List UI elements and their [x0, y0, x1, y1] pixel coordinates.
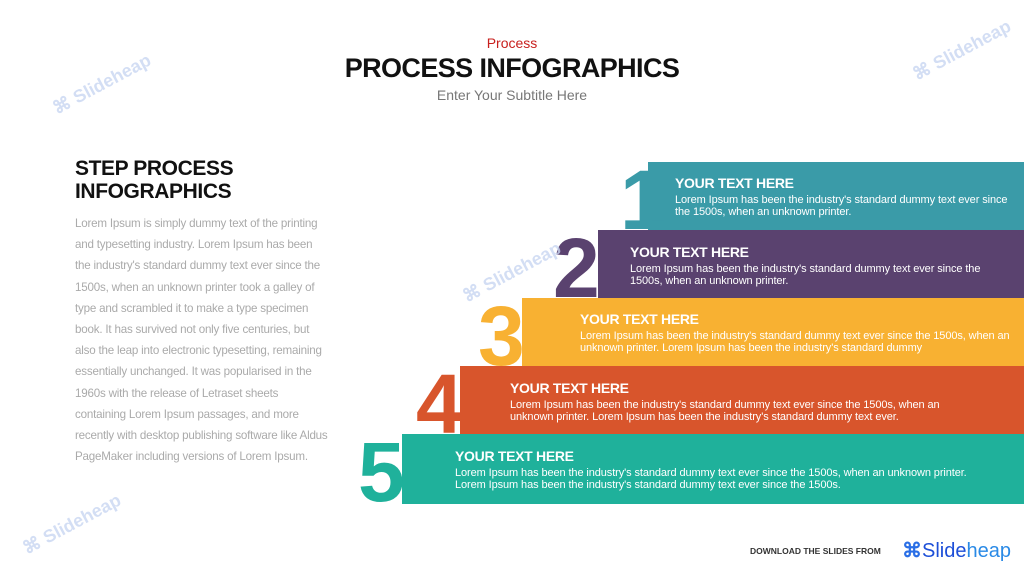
- subtitle: Enter Your Subtitle Here: [437, 87, 587, 103]
- band 2: [598, 230, 1024, 298]
- title: PROCESS INFOGRAPHICS: [345, 53, 679, 83]
- header: [345, 35, 679, 103]
- band 1: [648, 162, 1024, 230]
- text 3: Lorem Ipsum has been the industry's standard dummy text ever since the 1500s, when an unknown printer. Lorem Ipsum has been the industry's standard dummy: [580, 330, 1010, 354]
- kicker: Process: [487, 35, 537, 51]
- text 3: [580, 311, 1010, 354]
- watermark: ⌘ Slideheap: [49, 50, 154, 118]
- left text block: [75, 157, 328, 463]
- band 5: [402, 434, 1024, 504]
- footer text: DOWNLOAD THE SLIDES FROM: [750, 546, 881, 556]
- watermark: ⌘ Slideheap: [459, 238, 564, 306]
- left heading: STEP PROCESS: [75, 157, 233, 180]
- logo: ⌘Slideheap: [902, 540, 1011, 562]
- text 4: YOUR TEXT HERE: [510, 380, 629, 396]
- step 5: [358, 434, 1024, 506]
- left heading: INFOGRAPHICS: [75, 180, 231, 203]
- band 3: [522, 298, 1024, 366]
- text 4: [510, 380, 940, 423]
- text 3: YOUR TEXT HERE: [580, 311, 699, 327]
- text 4: Lorem Ipsum has been the industry's standard dummy text ever since the 1500s, when an unknown printer. Lorem Ipsum has been the industry's standard dummy text ever.: [510, 399, 940, 423]
- watermark: ⌘ Slideheap: [909, 16, 1014, 84]
- step 4: [416, 366, 1024, 438]
- footer brand: [750, 540, 1011, 562]
- band 4: [460, 366, 1024, 434]
- text 5: YOUR TEXT HERE: [455, 448, 574, 464]
- text 1: [675, 175, 1007, 218]
- left heading: [75, 157, 233, 203]
- text 5: [455, 448, 967, 491]
- step 1: [620, 162, 1024, 234]
- text 2: YOUR TEXT HERE: [630, 244, 749, 260]
- text 2: [630, 244, 980, 287]
- step 3: [478, 298, 1024, 370]
- text 1: Lorem Ipsum has been the industry's standard dummy text ever since the 1500s, when an unknown printer.: [675, 194, 1007, 218]
- left body: Lorem Ipsum is simply dummy text of the printing and typesetting industry. Lorem Ipsum has been the industry's standard dummy text ever since the 1500s, when an unknown printer took a galley of type and scrambled it to make a type specimen book. It has survived not only five centuries, but also the leap into electronic typesetting, remaining essentially unchanged. It was popularised in the 1960s with the release of Letraset sheets containing Lorem Ipsum passages, and more recently with desktop publishing software like Aldus PageMaker including versions of Lorem Ipsum.: [75, 217, 328, 463]
- watermark: ⌘ Slideheap: [19, 490, 124, 558]
- text 2: Lorem Ipsum has been the industry's standard dummy text ever since the 1500s, when an unknown printer.: [630, 263, 980, 287]
- step 2: [553, 230, 1024, 302]
- text 5: Lorem Ipsum has been the industry's standard dummy text ever since the 1500s, when an unknown printer. Lorem Ipsum has been the industry's standard dummy text ever since the 1500s.: [455, 467, 967, 491]
- text 1: YOUR TEXT HERE: [675, 175, 794, 191]
